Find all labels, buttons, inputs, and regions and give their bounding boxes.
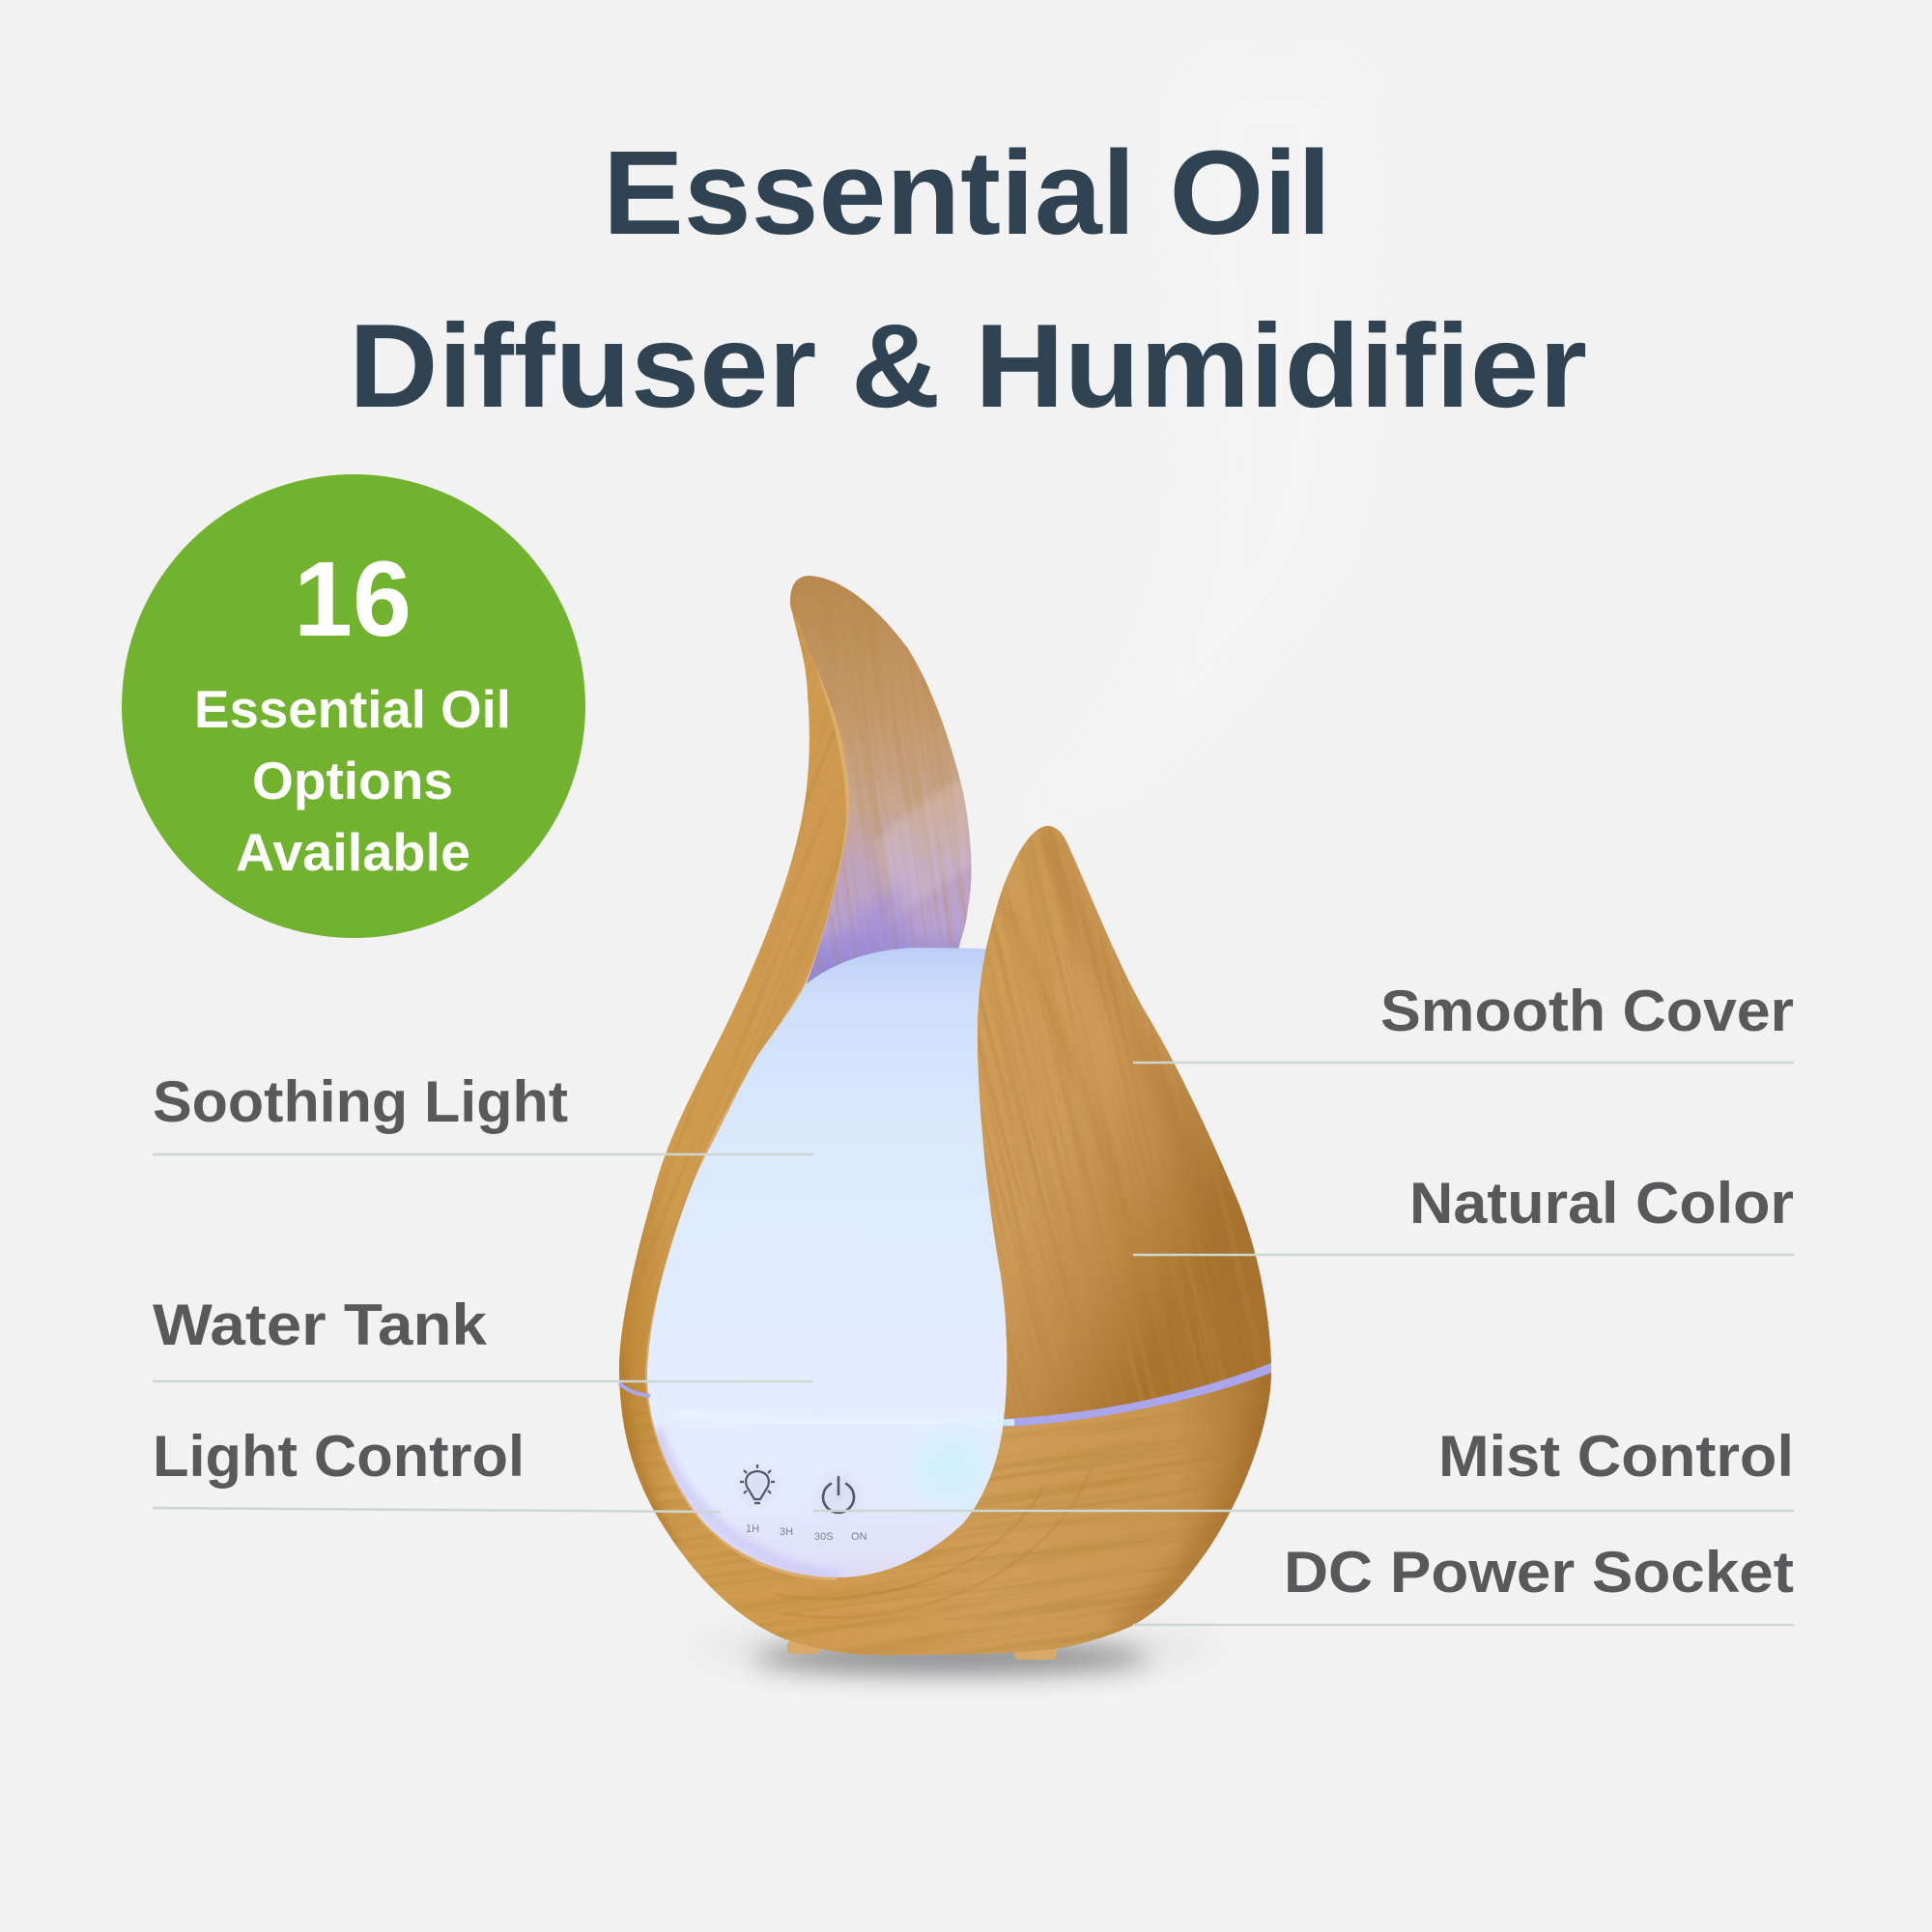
button captions: [746, 1523, 867, 1543]
infographic canvas: [122, 147, 1794, 1691]
icon: light bulb button: [732, 1460, 782, 1510]
callout: water tank: Water Tank: [153, 1293, 488, 1357]
button captions: 30S: [814, 1531, 834, 1543]
badge: 16 essential oil options: Essential Oil: [194, 679, 511, 739]
diffuser product illustration: [618, 576, 1271, 1691]
wood shell: [618, 603, 1271, 1656]
callout: dc power socket: DC Power Socket: [1284, 1540, 1794, 1605]
callout: light control: [153, 1424, 721, 1512]
button captions: 1H: [746, 1523, 759, 1535]
callout: light control: Light Control: [153, 1424, 525, 1489]
callout: mist control: Mist Control: [1438, 1424, 1794, 1489]
bottom grain: [622, 1374, 1271, 1656]
water tank, glowing: [628, 948, 1024, 1594]
title: Diffuser & Humidifier: [349, 300, 1587, 433]
back wing, inner wood with purple glow: [790, 576, 972, 984]
right shell grain: [978, 826, 1271, 1422]
title: Essential Oil: [603, 128, 1331, 260]
callout: soothing light: Soothing Light: [153, 1069, 568, 1134]
badge: 16 essential oil options: [122, 474, 585, 938]
badge: 16 essential oil options: Options: [252, 751, 453, 810]
badge: 16 essential oil options: 16: [294, 540, 412, 659]
badge: 16 essential oil options: Available: [236, 822, 470, 882]
light band: [619, 1363, 1271, 1427]
icon: power button: [810, 1464, 867, 1522]
mist plume: [976, 58, 1372, 850]
callout: natural color: Natural Color: [1409, 1171, 1794, 1236]
left rim grain: [620, 621, 844, 1391]
floor shadow: [696, 1615, 1217, 1681]
title: [349, 128, 1587, 433]
feet: [787, 1640, 1057, 1660]
button captions: 3H: [780, 1526, 793, 1538]
button captions: ON: [851, 1531, 867, 1543]
callout: smooth cover: Smooth Cover: [1380, 979, 1794, 1043]
